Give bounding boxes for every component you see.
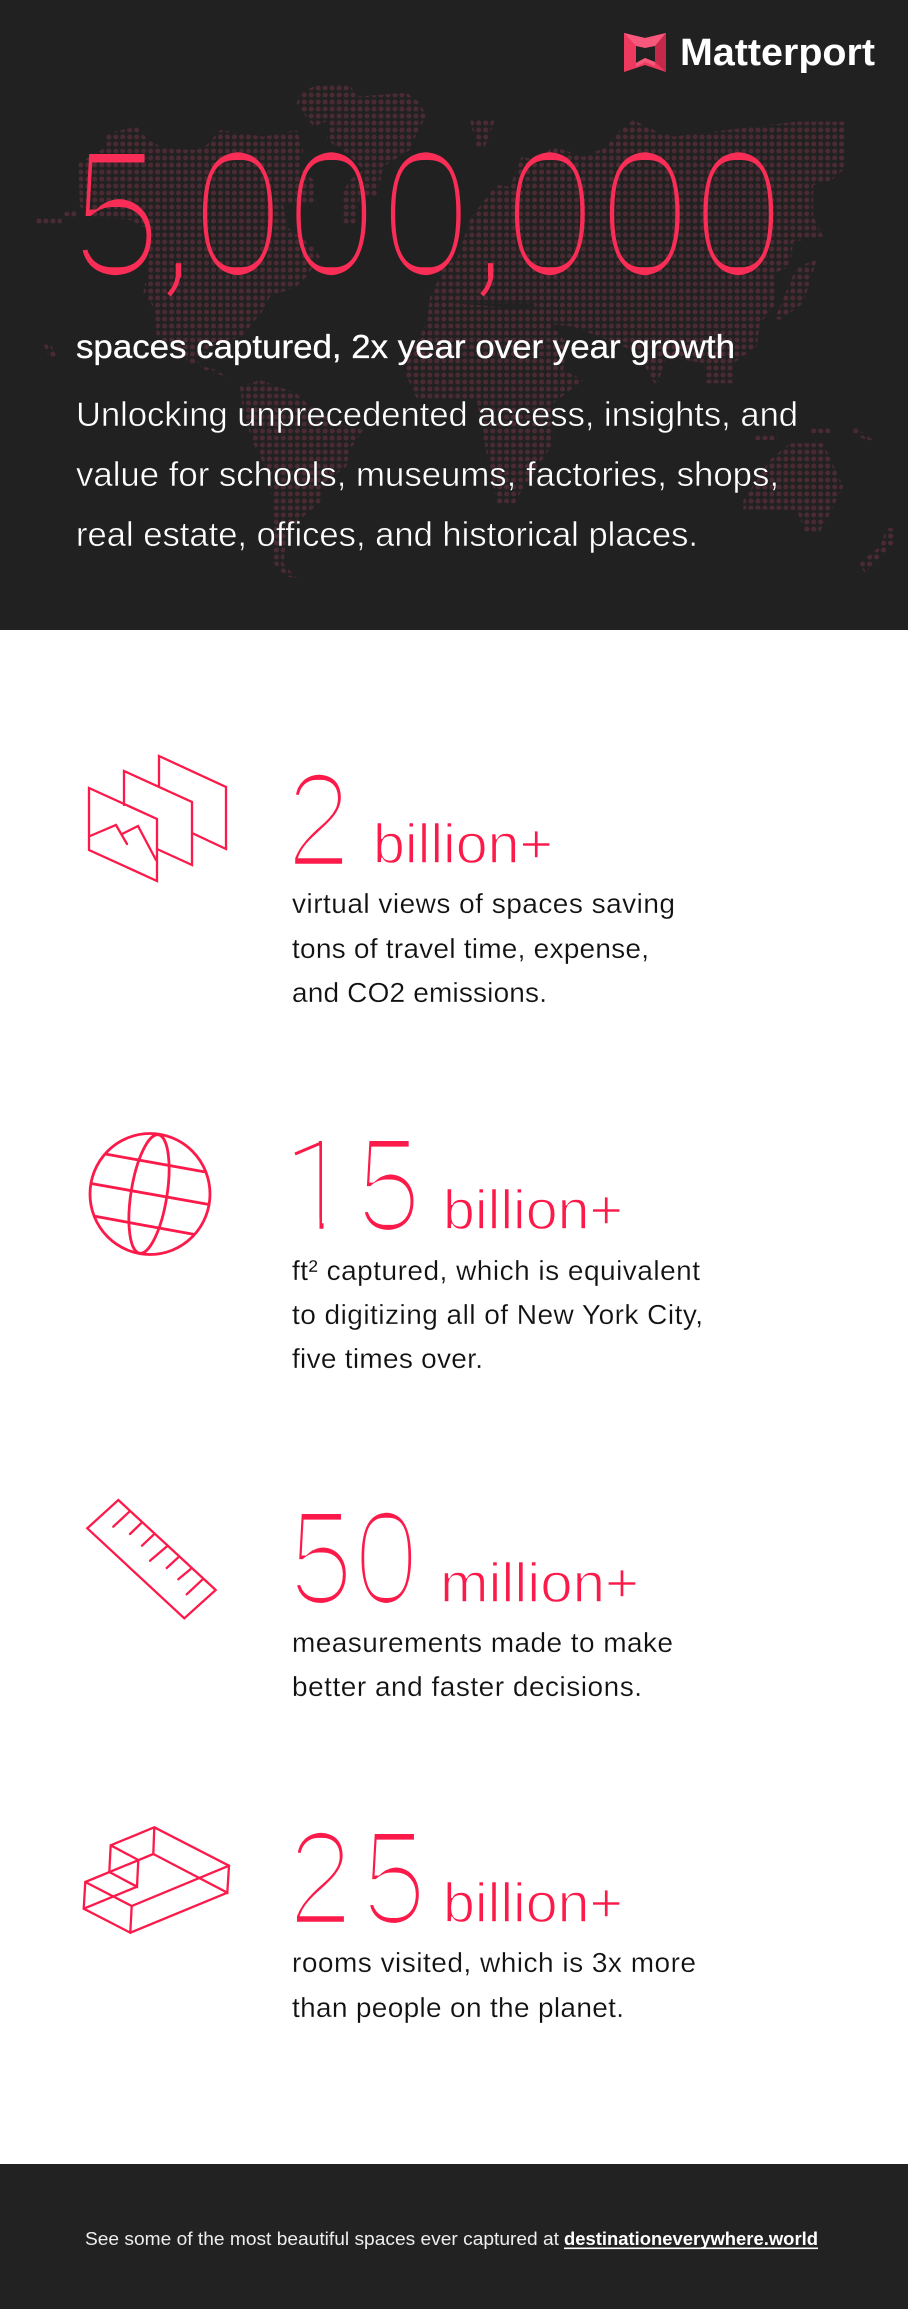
panel: dark hero xyxy=(0,0,908,630)
icon: isometric floor plan block xyxy=(84,1827,229,1933)
panel: 50 million measurements xyxy=(87,1484,673,1702)
stat: 15 billion+: 5 xyxy=(356,1111,423,1260)
subheading: spaces captured, 2x year over year growth xyxy=(76,328,735,365)
stat description: than people on the planet. xyxy=(292,1992,624,2023)
stat description: better and faster decisions. xyxy=(292,1671,642,1702)
stat: 2 billion+: billion+ xyxy=(373,812,553,875)
stat description: tons of travel time, expense, xyxy=(292,933,649,964)
stat description: virtual views of spaces saving xyxy=(292,888,675,919)
stat: 25 billion+ xyxy=(287,1804,623,1953)
stat: 50 million+ xyxy=(288,1484,639,1633)
headline number xyxy=(82,152,774,296)
stat description xyxy=(292,888,675,1008)
stat: 25 billion+: 5 xyxy=(361,1804,428,1953)
stat description xyxy=(292,1627,673,1702)
stat: 15 billion+ xyxy=(285,1111,623,1260)
stat: 2 billion+: 2 xyxy=(285,746,352,895)
stat: 15 billion+: billion+ xyxy=(443,1178,623,1241)
stat description: rooms visited, which is 3x more xyxy=(292,1947,696,1978)
stat: 50 million+: 0 xyxy=(353,1484,420,1633)
stat: 50 million+: million+ xyxy=(440,1551,639,1614)
hero description: real estate, offices, and historical places. xyxy=(76,516,698,554)
icon: globe xyxy=(90,1132,210,1256)
panel: 2 billion views xyxy=(89,746,675,1008)
stat description: ft² captured, which is equivalent xyxy=(292,1255,700,1286)
stat: 15 billion+: 1 xyxy=(285,1111,352,1260)
stat description xyxy=(292,1255,703,1374)
hero description: value for schools, museums, factories, shops, xyxy=(76,456,779,494)
stat: 25 billion+: billion+ xyxy=(443,1871,623,1934)
icon: stacked image panels xyxy=(89,756,226,881)
stat: 25 billion+: 2 xyxy=(287,1804,354,1953)
hero description xyxy=(76,396,798,554)
stat description: measurements made to make xyxy=(292,1627,673,1658)
headline number: 5,000,000 xyxy=(70,113,785,319)
stat: 50 million+: 5 xyxy=(288,1484,355,1633)
panel: footer xyxy=(0,2164,908,2309)
panel: 15 billion square feet xyxy=(90,1111,703,1374)
footer text: See some of the most beautiful spaces ever captured at xyxy=(85,2229,559,2249)
icon: Matterport logo xyxy=(624,33,666,72)
stat description: to digitizing all of New York City, xyxy=(292,1299,703,1330)
icon: ruler xyxy=(87,1500,216,1618)
stat: 2 billion+ xyxy=(285,746,553,895)
stat description: five times over. xyxy=(292,1343,483,1374)
stat description xyxy=(292,1947,696,2023)
stat description: and CO2 emissions. xyxy=(292,977,547,1008)
hero description: Unlocking unprecedented access, insights, and xyxy=(76,396,798,434)
world dot map xyxy=(36,86,893,578)
panel: 25 billion rooms xyxy=(84,1804,696,2023)
footer link: destinationeverywhere.world xyxy=(564,2229,818,2249)
logo wordmark: Matterport xyxy=(680,32,875,74)
